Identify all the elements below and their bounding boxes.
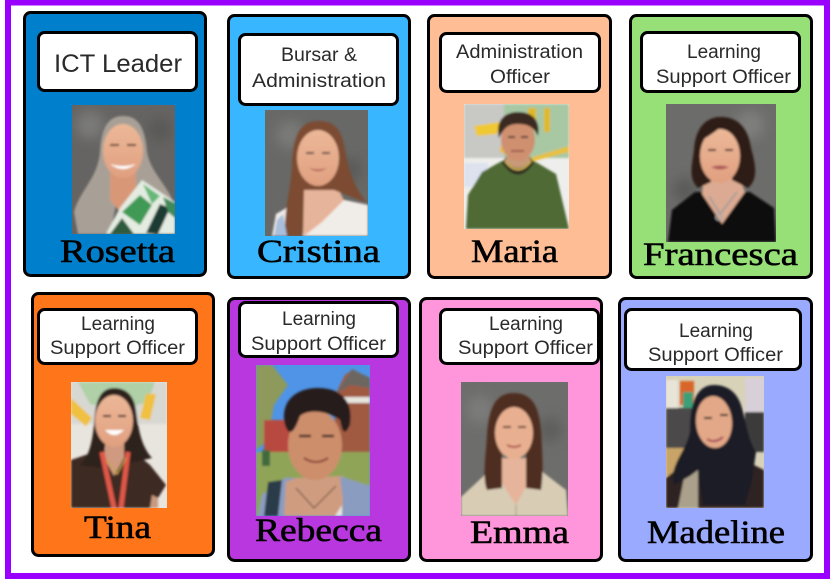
role label: Learning Support Officer: Support Officer <box>656 67 792 88</box>
photo: Madeline <box>666 376 764 508</box>
role label: ICT Leader <box>38 32 196 90</box>
name: Francesca: Francesca <box>643 237 798 273</box>
role label: Learning Support Officer <box>240 302 398 356</box>
role label: Learning Support Officer: Support Officer <box>50 338 186 359</box>
role label: Bursar and Administration <box>240 34 398 104</box>
name: Rosetta: Rosetta <box>60 234 175 270</box>
role label: Learning Support Officer: Support Officer <box>458 338 594 359</box>
role label: Learning Support Officer: Learning <box>489 314 563 335</box>
role label: Learning Support Officer <box>642 32 800 92</box>
role label: Learning Support Officer <box>38 310 196 364</box>
photo: Rosetta <box>72 105 175 234</box>
role label: Bursar and Administration: Bursar & <box>281 45 357 66</box>
photo: Rebecca <box>256 365 370 516</box>
card: Emma <box>420 298 602 560</box>
photo: Emma <box>461 382 568 516</box>
name: Rebecca: Rebecca <box>255 513 382 549</box>
role label: Learning Support Officer <box>440 310 598 364</box>
card: Rosetta <box>24 12 206 276</box>
photo: Francesca <box>666 104 776 242</box>
role label: Learning Support Officer: Learning <box>679 321 753 342</box>
photo: Tina <box>71 382 167 508</box>
role label: Administration Officer <box>440 34 600 92</box>
card: Rebecca <box>228 298 410 560</box>
role label: Learning Support Officer: Support Officer <box>251 334 387 355</box>
photo: Maria <box>464 104 569 229</box>
photo: Cristina <box>265 110 368 236</box>
role label: Bursar and Administration: Administration <box>252 71 386 92</box>
role label: Learning Support Officer: Support Officer <box>648 345 784 366</box>
role label: Learning Support Officer: Learning <box>282 309 356 330</box>
role label: Learning Support Officer <box>626 310 800 370</box>
name: Madeline: Madeline <box>647 515 785 551</box>
role label: ICT Leader: ICT Leader <box>54 50 182 78</box>
role label: Administration Officer: Officer <box>490 67 551 88</box>
card: Cristina <box>228 16 410 278</box>
name: Tina: Tina <box>84 510 151 546</box>
name: Emma: Emma <box>470 515 569 551</box>
name: Cristina: Cristina <box>257 234 380 270</box>
card: Madeline <box>620 298 812 560</box>
card: Tina <box>32 294 214 556</box>
role label: Learning Support Officer: Learning <box>81 314 155 335</box>
card: Francesca <box>630 16 812 278</box>
role label: Learning Support Officer: Learning <box>687 42 761 63</box>
role label: Administration Officer: Administration <box>456 42 583 63</box>
card: Maria <box>428 16 610 278</box>
name: Maria: Maria <box>471 234 558 270</box>
